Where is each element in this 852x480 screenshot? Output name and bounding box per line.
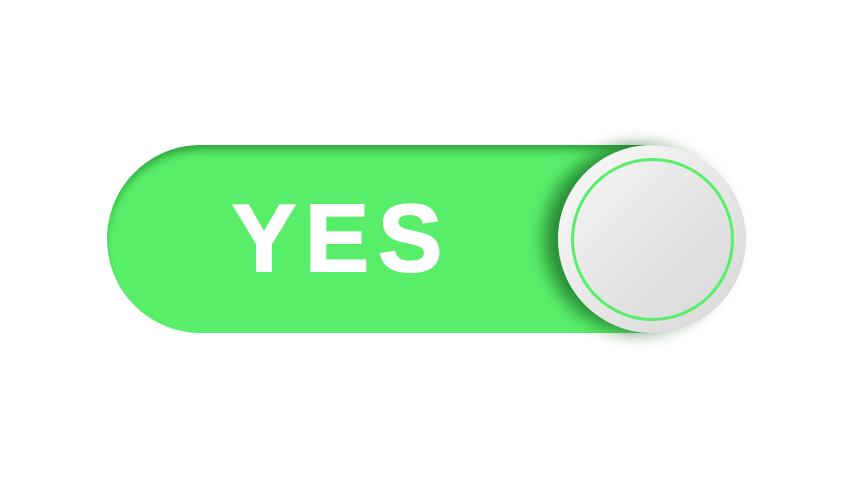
knob [558,145,746,333]
label: YES: YES [232,185,451,292]
knob ring [571,158,734,321]
toggle track (green pill) [107,145,745,333]
toggle switch [107,134,746,344]
